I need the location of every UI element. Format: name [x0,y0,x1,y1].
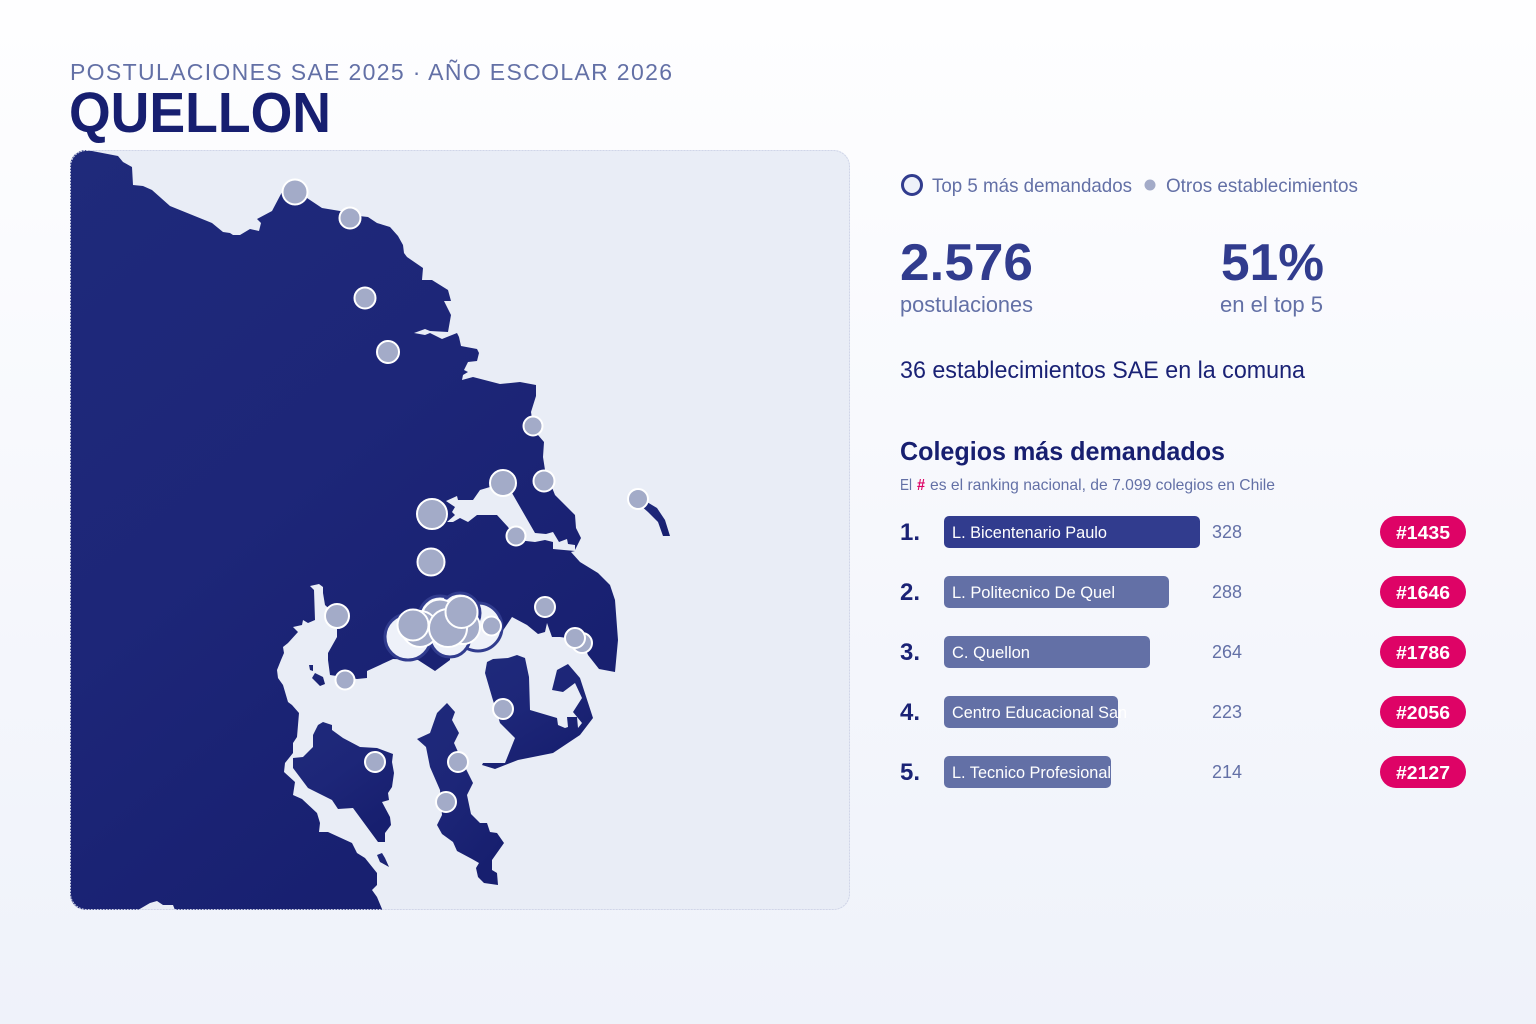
panel: map [60,140,850,920]
legend: top 5 ring [902,176,922,194]
row 5 [900,756,1466,788]
legend: top 5 label: Top 5 más demandados [932,175,1132,197]
row 2 [900,576,1466,608]
row 4 [900,696,1466,728]
stat: top 5 share: en el top 5 [1220,292,1323,317]
legend [902,175,1358,197]
row 4: 4. [900,699,920,726]
row 3: C. Quellon [952,643,1030,662]
row 1: 328 [1212,521,1242,542]
map: school markers [282,180,648,812]
row 5: 214 [1212,761,1242,782]
row 4: #2056 [1396,702,1450,723]
row 5: 5. [900,759,920,786]
ranking note: # [917,477,925,494]
row 3: #1786 [1396,642,1450,663]
row 1: #1435 [1396,522,1450,543]
row 1 [900,516,1466,548]
row 5: L. Tecnico Profesional [952,763,1111,782]
ranking note: es el ranking nacional, de 7.099 colegios en Chile [930,477,1275,494]
row 2: 288 [1212,581,1242,602]
row 3: 3. [900,639,920,666]
establishments count: 36 establecimientos SAE en la comuna [900,357,1306,384]
subtitle: POSTULACIONES SAE 2025 · AÑO ESCOLAR 2026 [70,59,672,85]
ranking note: El [900,477,912,494]
map: top 5 school halos [385,593,502,660]
stat: top 5 share: 51% [1221,234,1324,292]
row 1: L. Bicentenario Paulo [952,523,1107,542]
row 5: #2127 [1396,762,1450,783]
row 2: #1646 [1396,582,1450,603]
legend: others label: Otros establecimientos [1166,175,1358,197]
row 3: 264 [1212,641,1242,662]
legend: others dot [1144,180,1156,190]
row 4: 223 [1212,701,1242,722]
title: QUELLON [69,81,331,145]
row 2: 2. [900,579,920,606]
stat: postulaciones: postulaciones [900,292,1033,317]
row 4: Centro Educacional San [952,703,1127,722]
map: land masses [60,140,670,920]
row 3 [900,636,1466,668]
row 1: 1. [900,519,920,546]
row 2: L. Politecnico De Quel [952,583,1115,602]
stat: postulaciones [900,234,1033,317]
stat: postulaciones: 2.576 [900,234,1033,292]
ranking heading: Colegios más demandados [900,436,1225,466]
stat: top 5 share [1220,234,1324,317]
